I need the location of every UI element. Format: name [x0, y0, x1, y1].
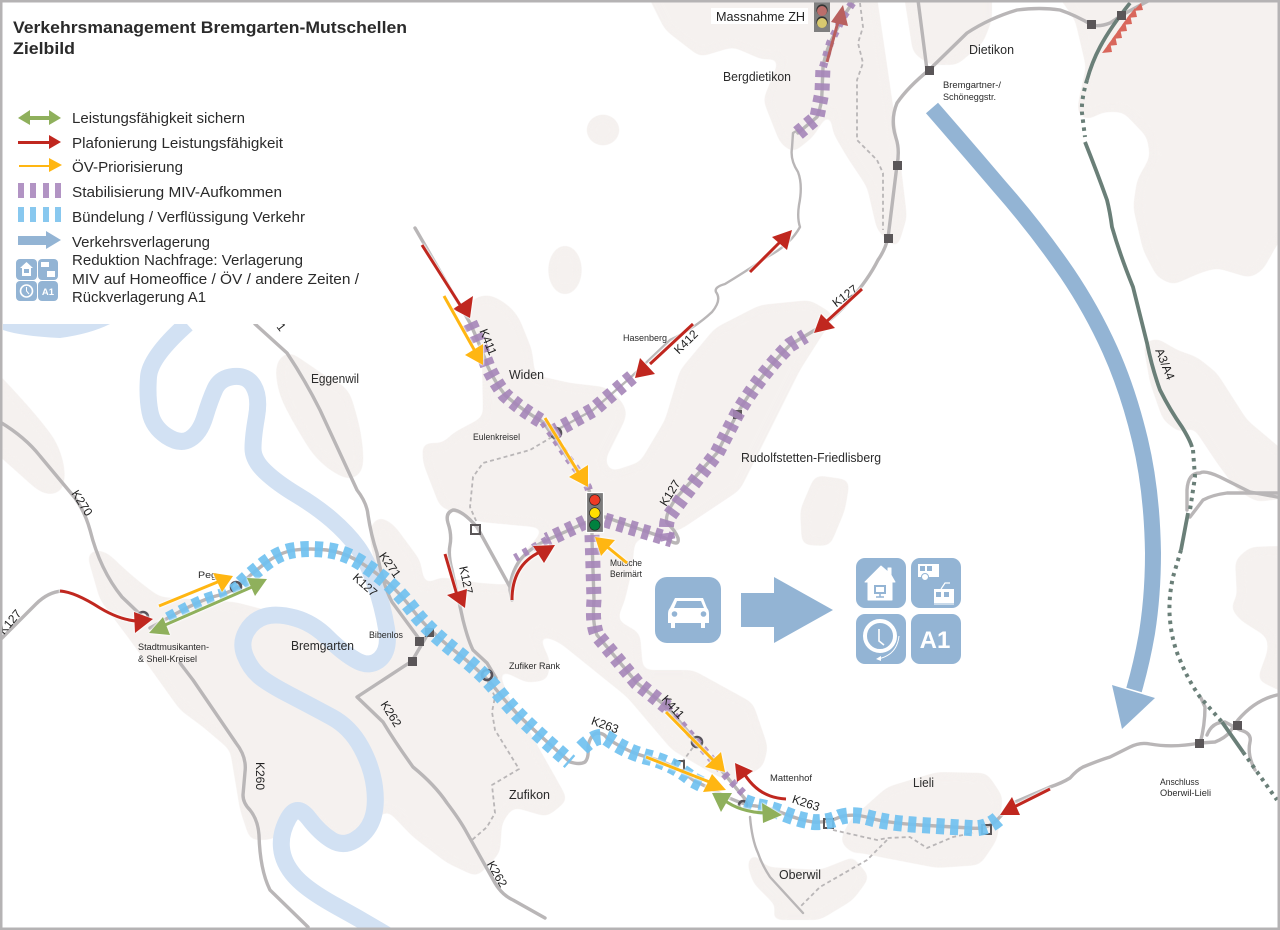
shift arrow [741, 577, 833, 643]
car icon tile [655, 577, 721, 643]
place names: Eggenwil [311, 372, 359, 386]
place names: Bremgarten [291, 639, 354, 653]
main traffic signal [586, 492, 604, 532]
local dashed paths [470, 3, 973, 907]
legend: capacity secure: Leistungsfähigkeit sichern [72, 111, 245, 127]
label K271 hidden by legend: K271 [261, 303, 289, 334]
legend: stabilisation [18, 183, 282, 201]
road number labels: K271 [376, 550, 404, 581]
road number labels: K262 [378, 698, 405, 730]
legend backdrop [0, 0, 366, 324]
legend: demand reduction text: MIV auf Homeoffice / ÖV / andere Zeiten / [72, 270, 360, 288]
road number labels: K263 [791, 792, 822, 814]
place names: Lieli [913, 776, 934, 790]
green capacity arrows [149, 578, 782, 823]
place names: Hasenberg [623, 333, 667, 344]
road number labels: K412 [671, 327, 701, 357]
road number labels: K411 [476, 327, 500, 358]
traffic shift arrow (large curved) [932, 108, 1155, 729]
place names: Schöneggstr. [943, 92, 996, 103]
legend [16, 110, 360, 306]
place names: Zufiker Rank [509, 661, 560, 672]
place names: Rudolfstetten-Friedlisberg [741, 451, 881, 465]
place names: Mattenhof [770, 773, 812, 784]
place names: Peg [198, 570, 217, 581]
motorway red hatch [1102, 3, 1143, 53]
legend: traffic shift: Verkehrsverlagerung [72, 235, 210, 251]
title [13, 18, 407, 58]
Massnahme ZH label: Massnahme ZH [716, 9, 805, 24]
bundling traffic (blue hatching) [168, 549, 1000, 828]
road number labels: K127 [350, 570, 380, 600]
legend: bundling [18, 207, 305, 226]
legend: stabilisation: Stabilisierung MIV-Aufkommen [72, 185, 282, 201]
place names: Eulenkreisel [473, 432, 520, 443]
yellow public transport priority arrows [159, 296, 726, 792]
legend: demand reduction icons: A1 [42, 287, 55, 298]
place names: Anschluss [1160, 777, 1199, 788]
title: Verkehrsmanagement Bremgarten-Mutschellen [13, 18, 407, 37]
road number labels: A3/A4 [1152, 346, 1178, 382]
place names: Bergdietikon [723, 70, 791, 84]
legend: capacity secure [18, 110, 245, 127]
legend: demand reduction icons [16, 259, 58, 301]
legend: traffic shift [18, 231, 210, 251]
place names: Oberwil-Lieli [1160, 788, 1211, 799]
place names: Zufikon [509, 788, 550, 802]
road number labels: K127 [456, 565, 476, 595]
place names: Oberwil [779, 868, 821, 882]
motorway A3/A4 [1082, 3, 1277, 800]
icon: other times clock [856, 614, 906, 664]
legend: demand reduction text: Rückverlagerung A1 [72, 290, 206, 306]
road number labels: K270 [68, 487, 96, 519]
ZH traffic signal [814, 2, 830, 32]
place names: Dietikon [969, 43, 1014, 57]
road number labels: K260 [253, 762, 267, 790]
place names: Bremgartner-/ [943, 80, 1001, 91]
junction nodes [138, 11, 1242, 834]
road number labels [0, 282, 1178, 890]
place names: Bibenlos [369, 630, 403, 641]
place names: & Shell-Kreisel [138, 654, 197, 665]
icon: bus and tram [911, 558, 961, 608]
road number labels: K127 [830, 282, 861, 310]
legend: capacity cap: Plafonierung Leistungsfähigkeit [72, 136, 283, 152]
road number labels: K263 [589, 714, 621, 736]
place names: Stadtmusikanten- [138, 642, 209, 653]
icon: home office [856, 558, 906, 608]
legend: demand reduction text [72, 253, 360, 306]
road number labels: K127 [657, 477, 684, 509]
icon: A1 motorway [911, 614, 961, 664]
place names: Mutsche [610, 558, 642, 569]
stabilisation MIV (purple hatching) [470, 2, 853, 795]
icon: A1 motorway: A1 [920, 627, 950, 654]
place names [138, 43, 1211, 882]
legend: demand reduction text: Reduktion Nachfrage: Verlagerung [72, 253, 303, 269]
ZH arrow [827, 5, 848, 62]
legend: public transport priority [19, 158, 183, 176]
title: Zielbild [13, 39, 75, 58]
road number labels: K411 [659, 692, 687, 722]
legend: bundling: Bündelung / Verflüssigung Verkehr [72, 210, 305, 226]
red capacity cap arrows [60, 230, 1050, 815]
place names: Berimärt [610, 569, 642, 580]
road number labels: K262 [484, 858, 510, 890]
river Reuss [3, 324, 395, 930]
place names: Widen [509, 368, 544, 382]
legend: public transport priority: ÖV-Priorisierung [72, 158, 183, 176]
